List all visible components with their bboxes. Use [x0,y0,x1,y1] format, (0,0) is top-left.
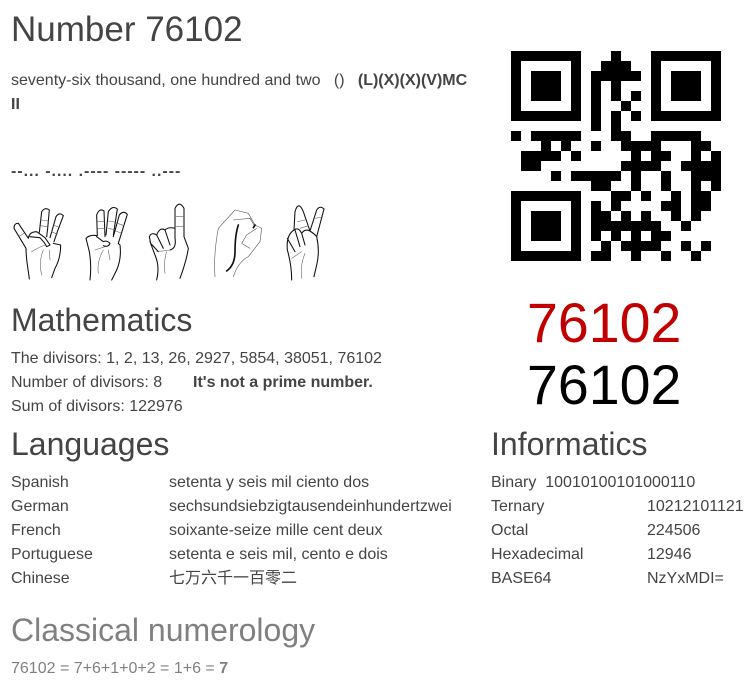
icon: hand sign 7 [14,209,63,279]
mathematics facts: It's not a prime number. [193,374,373,391]
translations table: 七万六千一百零二 [169,570,297,587]
informatics table: Ternary [491,498,544,515]
informatics table [491,474,744,587]
QR code [511,51,721,261]
number in words and roman numeral [11,72,467,113]
heading: Informatics: Informatics [491,426,647,462]
translations table: French [11,522,61,539]
icon: hand sign 0 [215,210,262,277]
translations table [11,474,452,587]
number in words and roman numeral: seventy-six thousand, one hundred and two () (L)(X)(X)(V)MC [11,72,467,89]
numerology calculation: 76102 = 7+6+1+0+2 = 1+6 = 7 [11,660,228,677]
heading: Classical numerology: Classical numerology [11,612,315,648]
translations table: soixante-seize mille cent deux [169,522,382,539]
informatics table: NzYxMDI= [647,570,724,587]
icon: hand sign 1 [149,204,188,280]
sign language hands [13,204,324,280]
informatics table: 10212101121 [647,498,744,515]
informatics table: 224506 [647,522,700,539]
heading: Mathematics: Mathematics [11,302,192,338]
translations table: sechsundsiebzigtausendeinhundertzwei [169,498,452,515]
informatics table: Binary 10010100101000110 [491,474,695,491]
big black number: 76102 [527,354,681,416]
informatics table: Hexadecimal [491,546,583,563]
translations table: setenta y seis mil ciento dos [169,474,369,491]
mathematics facts: Number of divisors: 8 [11,374,162,391]
number in words and roman numeral: II [11,96,20,113]
translations table: Spanish [11,474,69,491]
informatics table: Octal [491,522,528,539]
mathematics facts: The divisors: 1, 2, 13, 26, 2927, 5854, 38051, 76102 [11,350,382,367]
heading: Languages: Languages [11,426,169,462]
title: Number 76102 [11,10,243,49]
mathematics facts [11,350,382,415]
informatics table: BASE64 [491,570,551,587]
icon: hand sign 2 [287,206,324,280]
translations table: Portuguese [11,546,93,563]
informatics table: 12946 [647,546,692,563]
big red number: 76102 [527,292,681,354]
mathematics facts: Sum of divisors: 122976 [11,398,183,415]
icon: hand sign 6 [86,208,127,280]
translations table: German [11,498,69,515]
translations table: Chinese [11,570,70,587]
morse code: --... -.... .---- ----- ..--- [11,163,181,180]
translations table: setenta e seis mil, cento e dois [169,546,388,563]
